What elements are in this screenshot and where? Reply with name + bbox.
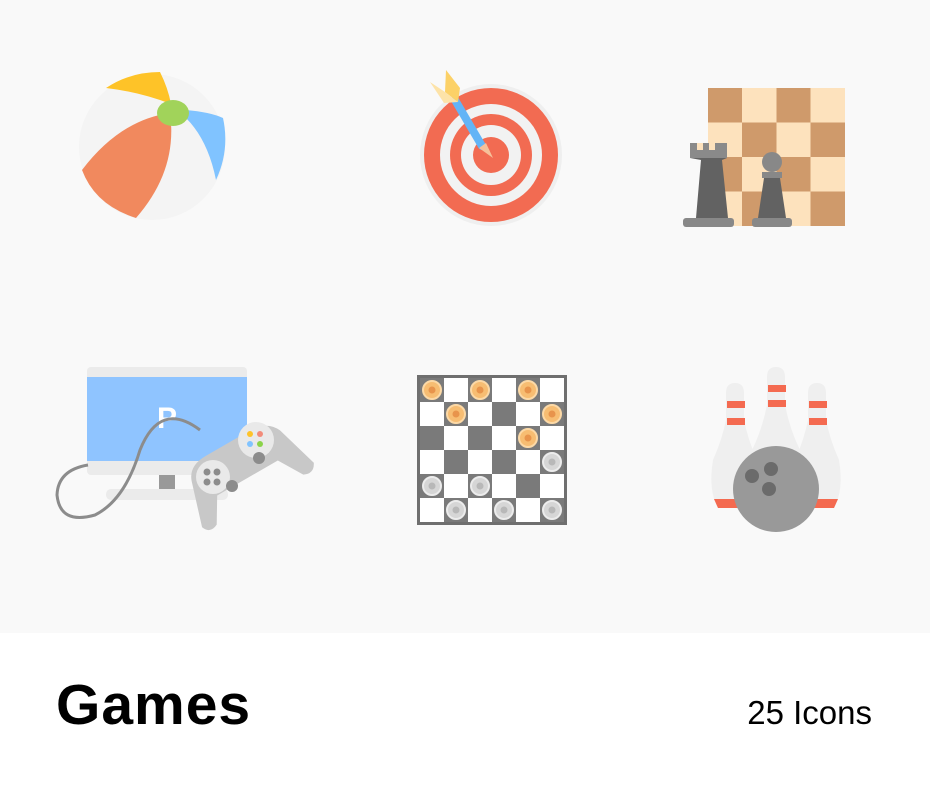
icon: chess — [683, 88, 845, 227]
icon: dartboard — [420, 70, 562, 226]
icon count: 25 Icons — [747, 694, 872, 731]
icon: game console — [57, 367, 317, 533]
title: Games — [56, 673, 251, 737]
icon: game console: P — [157, 402, 177, 435]
icon: beach ball — [79, 72, 225, 220]
icon: checkers board — [417, 375, 567, 525]
icon: bowling — [711, 367, 841, 532]
